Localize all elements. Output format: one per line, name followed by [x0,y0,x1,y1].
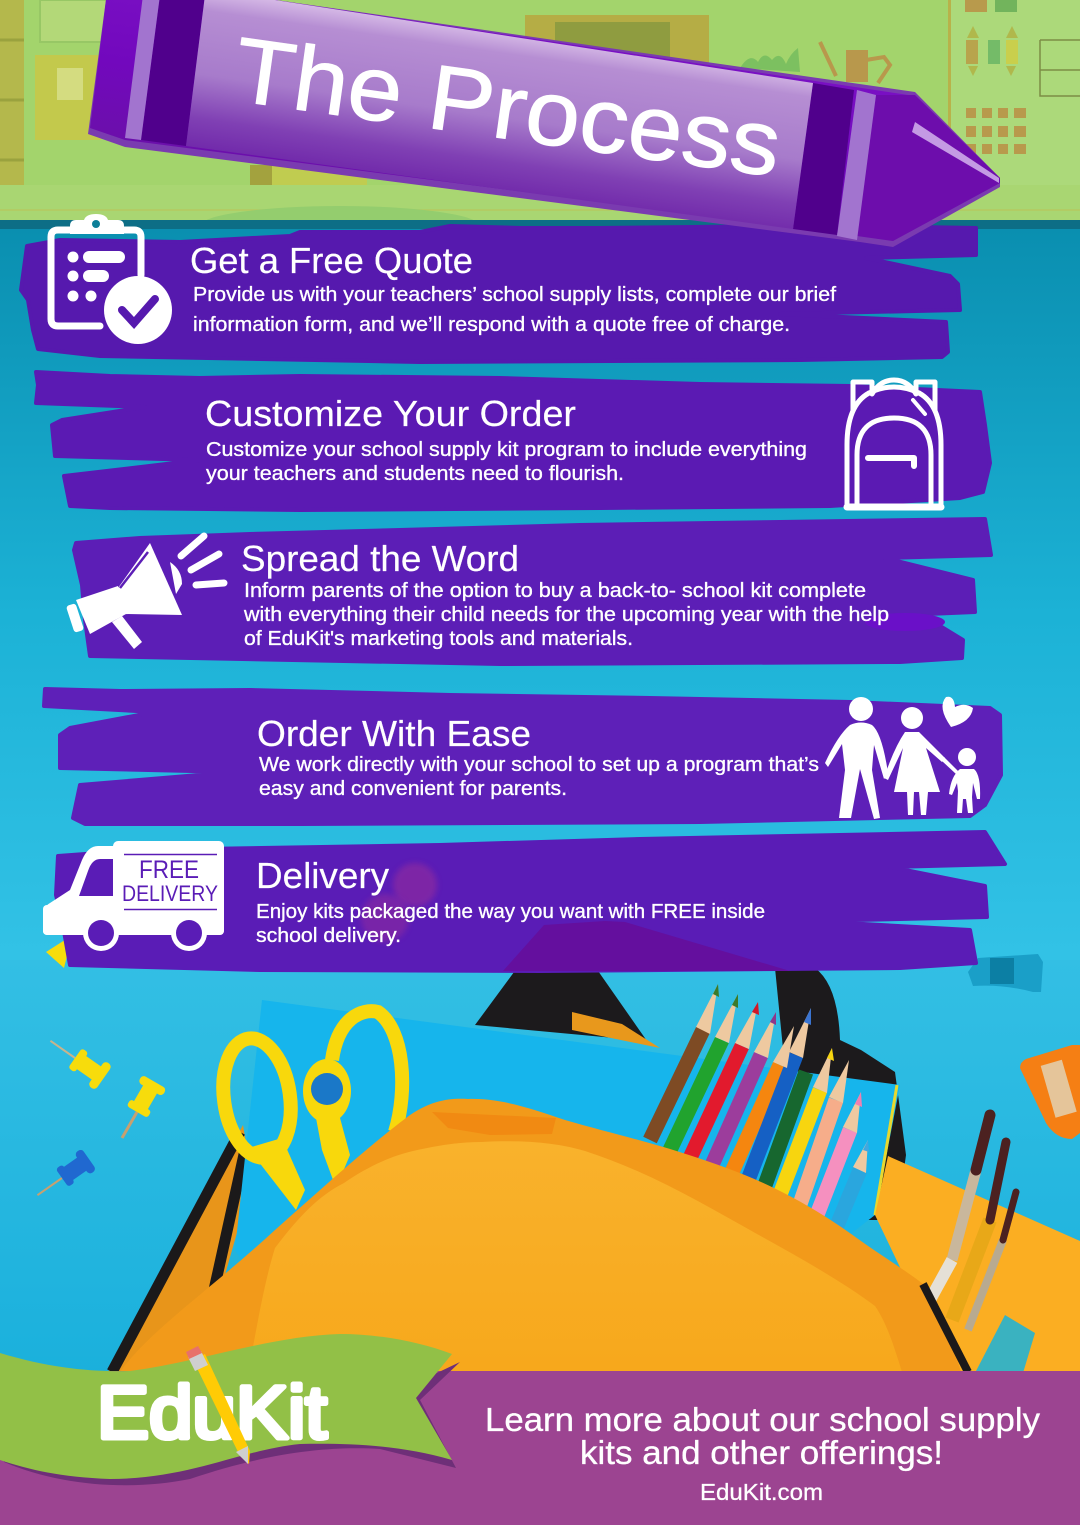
text block: school delivery. [256,924,401,947]
brush stroke 4 [44,689,1001,824]
text block: Provide us with your teachers’ school supply lists, complete our brief [193,283,836,306]
left light stripe [125,0,160,140]
scissors [216,1011,402,1210]
step 4: order with ease [257,697,980,819]
step 1: get a free quote [51,214,836,344]
crayon label [186,0,813,229]
step 3: spread the word [66,536,889,650]
backpack and school supplies photo [30,938,1080,1373]
bag straps [475,968,906,1220]
bag pocket and zipper [108,1125,252,1372]
purple brush strokes [21,226,1005,971]
classroom background [0,0,1080,246]
pencils [650,1030,860,1228]
title: The Process [228,19,787,196]
footer band [0,1371,1080,1525]
crayon title banner [88,0,1000,247]
text block [243,579,889,650]
paint brushes [930,1115,1016,1330]
text block [256,900,765,947]
text block: Enjoy kits packaged the way you want with FREE inside [256,900,765,923]
brush stroke 5 [56,832,1005,971]
green flag [0,1334,452,1479]
heading: Spread the Word [241,538,519,579]
brush stroke 2 [36,372,990,510]
text block [206,438,807,485]
icon: clipboard with check [51,214,172,344]
cone highlight [912,122,999,183]
paint ghosts through stroke [361,613,945,971]
text block: Inform parents of the option to buy a back-to- school kit complete [244,579,866,602]
text block [193,283,836,336]
orange backpack [120,1099,961,1372]
bag fold [432,1112,556,1135]
text block: Customize your school supply kit program to include everything [206,438,807,461]
blue marker [975,1315,1035,1373]
left dark band [141,0,205,146]
heading: Delivery [256,855,389,896]
teal background [0,220,1080,1380]
icon: free delivery truck [43,841,224,951]
sharpeners [1020,1045,1080,1139]
call to action: kits and other offerings! [580,1434,943,1471]
heading: Order With Ease [257,713,531,754]
crayon body [88,0,1000,247]
step 5: delivery [43,841,765,951]
cone tip [857,95,1000,241]
push pins [30,938,167,1206]
logo wordmark: EduKit [97,1371,327,1454]
flag shadow [0,1362,460,1485]
right dark band [793,83,854,235]
text block: information form, and we’ll respond with a quote free of charge. [193,313,790,336]
orange map paper [875,1156,1080,1372]
step 2: customize your order [205,380,941,507]
call to action [485,1401,1041,1505]
call to action: EduKit.com [700,1479,823,1505]
notebook [235,1000,900,1320]
icon: family with heart [825,697,980,819]
heading: Get a Free Quote [190,240,473,281]
text block: your teachers and students need to flourish. [206,462,624,485]
text block: with everything their child needs for the upcoming year with the help [243,603,889,626]
icon: free delivery truck: FREE [139,856,199,884]
brush stroke 3 [74,519,991,664]
right light stripe [837,90,876,240]
text block [259,753,819,800]
text block: We work directly with your school to set up a program that’s [259,753,819,776]
brush stroke 1 [21,226,976,362]
icon: backpack [847,380,941,507]
icon: megaphone [66,536,224,649]
pencil [186,1346,250,1464]
text block: of EduKit's marketing tools and materials. [244,627,633,650]
heading: Customize Your Order [205,393,576,434]
edukit flag logo [0,1334,460,1485]
icon: free delivery truck: DELIVERY [122,881,218,906]
call to action: Learn more about our school supply [485,1401,1041,1438]
text block: easy and convenient for parents. [259,777,567,800]
